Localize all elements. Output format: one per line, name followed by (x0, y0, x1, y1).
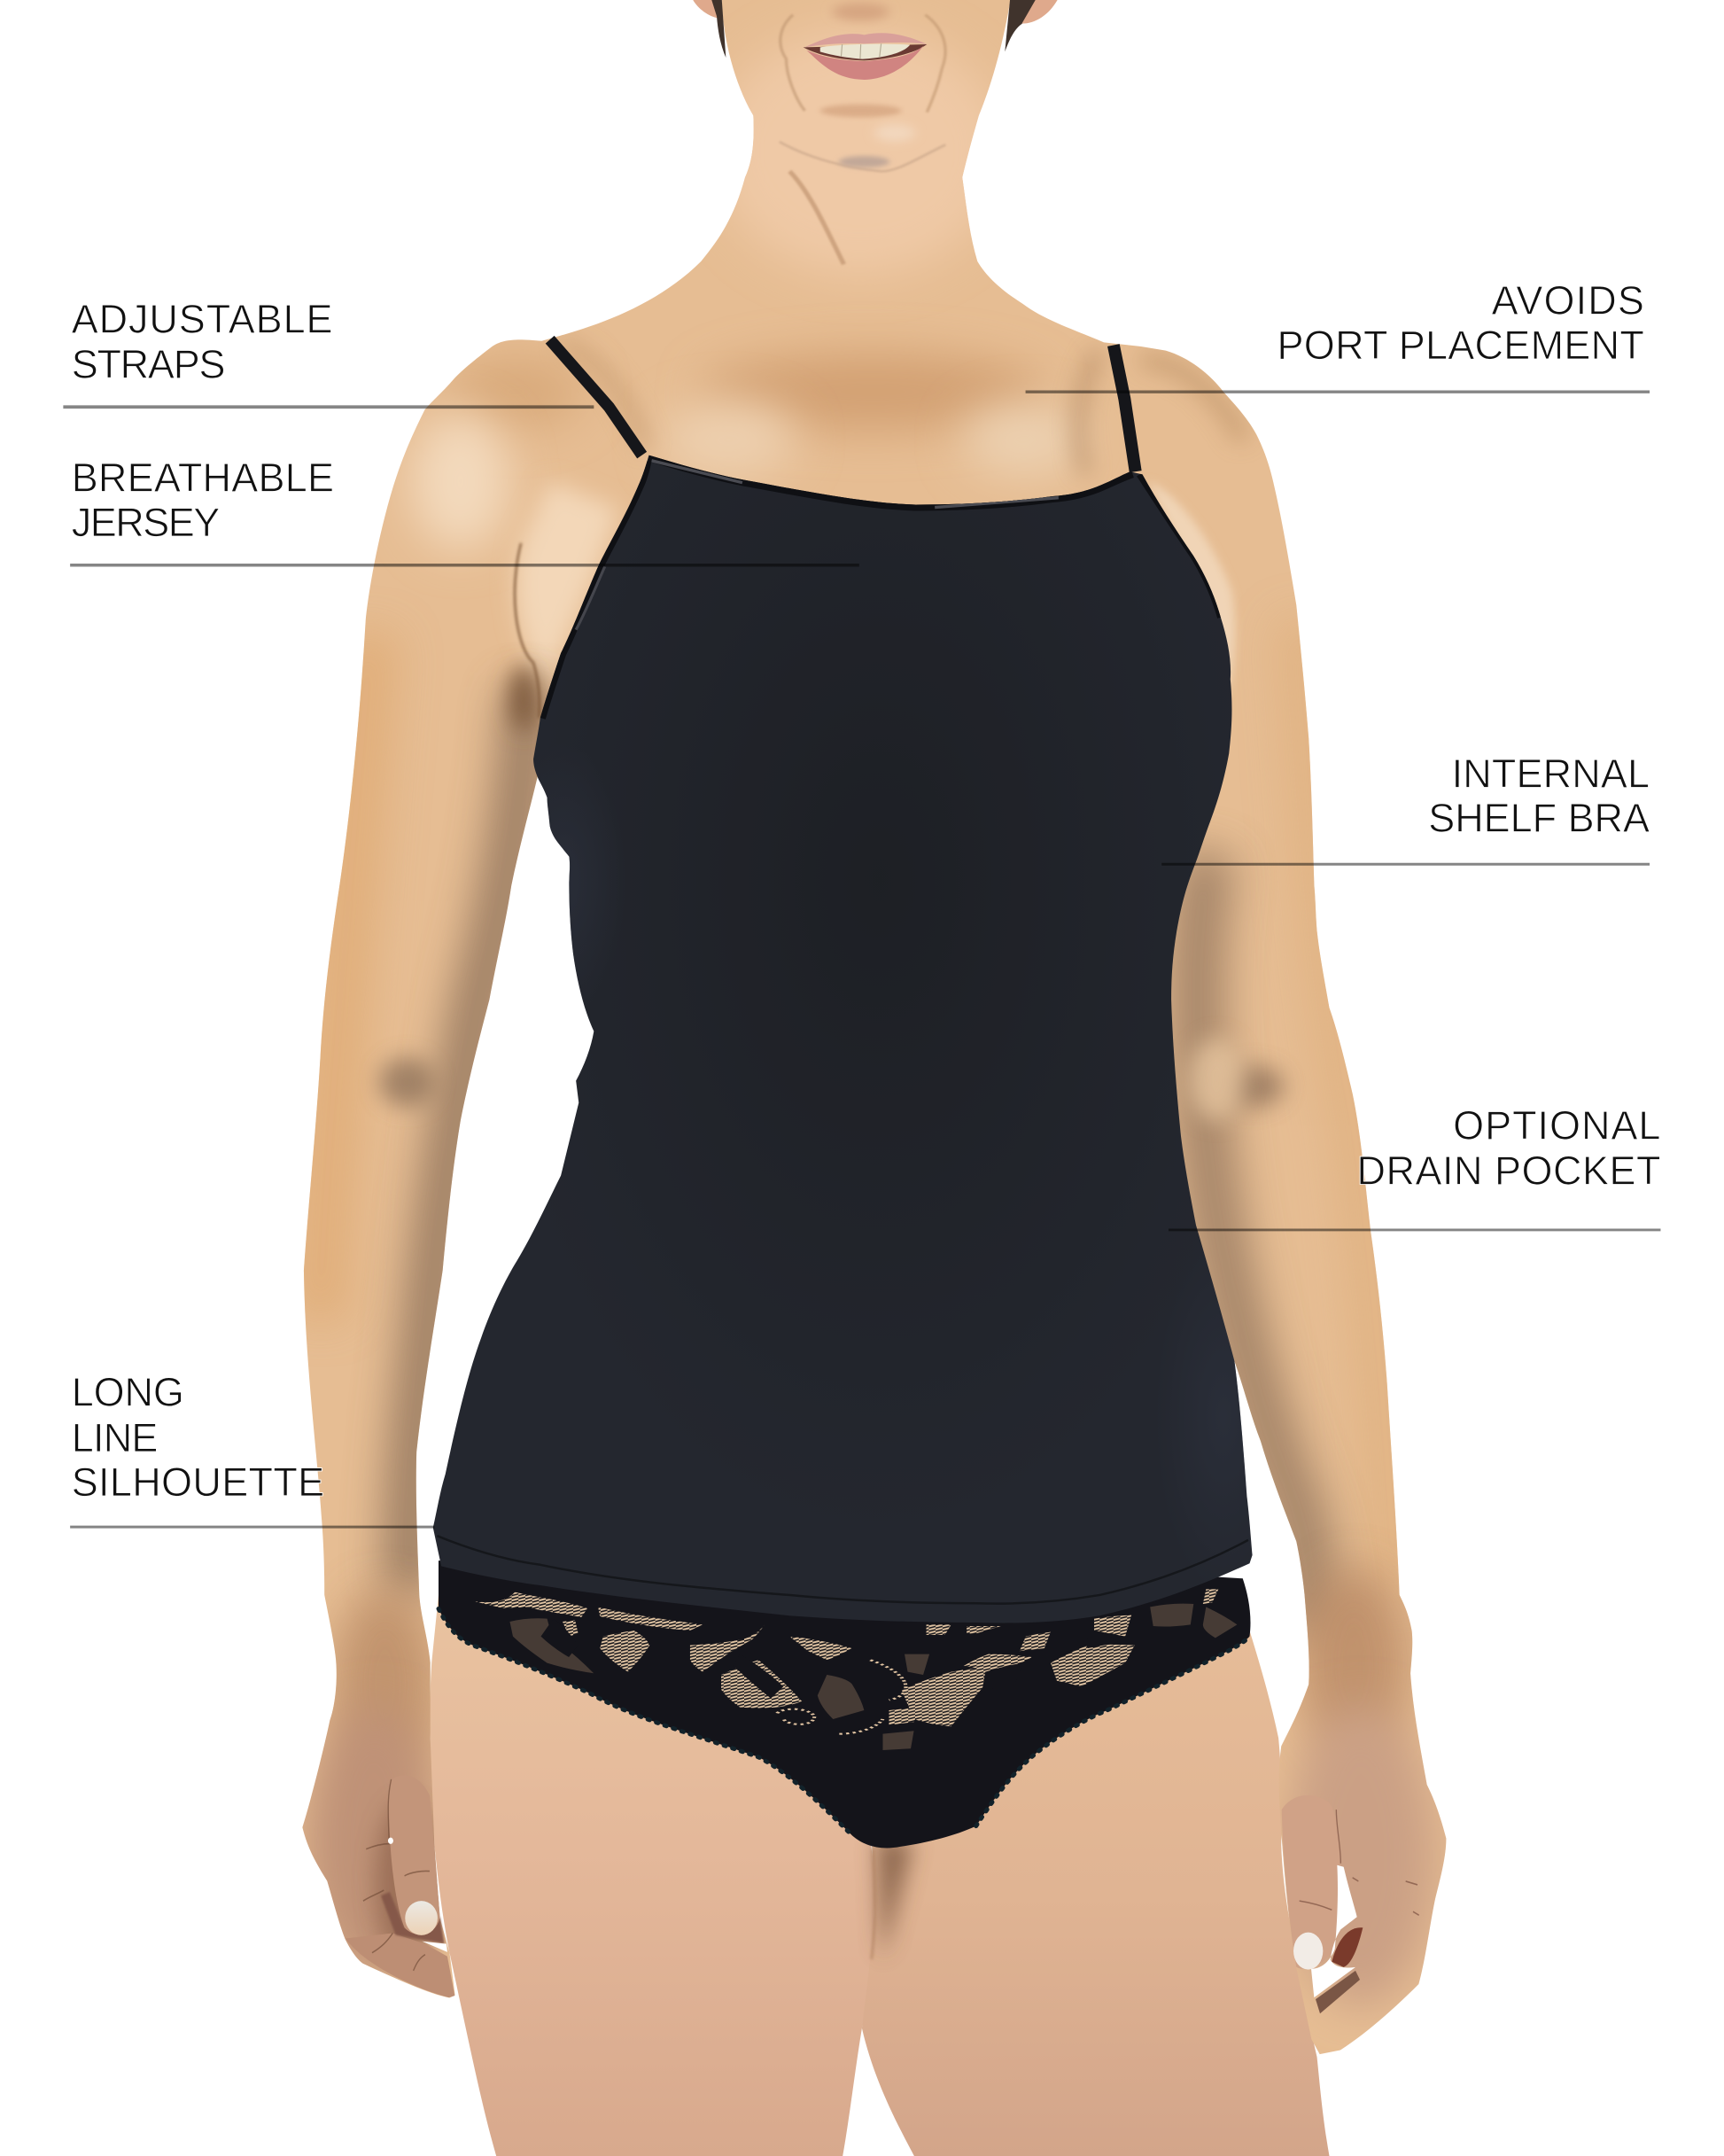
crotch shadow (877, 1835, 912, 1959)
label: optional drain pocket: OPTIONAL (1453, 1103, 1660, 1148)
leader line: breathable jersey (70, 564, 859, 566)
label: long line silhouette: SILHOUETTE (72, 1459, 324, 1505)
left shoulder tone (447, 356, 584, 428)
dark centre tone (481, 220, 1278, 1540)
chin highlight (874, 124, 915, 142)
right dark fingertip (1332, 1927, 1363, 1967)
label: optional drain pocket: DRAIN POCKET (1357, 1148, 1660, 1194)
right hand details (1282, 1795, 1419, 2013)
right elbow (1223, 1066, 1284, 1107)
neck and chest tone (733, 26, 987, 276)
paisley dotted outline (777, 1660, 905, 1734)
underwear (439, 1553, 1250, 1848)
label: optional drain pocket (1357, 1103, 1660, 1194)
right ear (1021, 0, 1058, 24)
label: breathable jersey: BREATHABLE (72, 455, 334, 501)
leader line: long line silhouette (70, 1526, 434, 1528)
chest light (660, 401, 797, 479)
label: adjustable straps: ADJUSTABLE (72, 297, 333, 342)
left hand details (346, 1775, 454, 1997)
left upper arm highlight (411, 412, 510, 550)
label: long line silhouette: LINE (72, 1415, 158, 1460)
left thumb (389, 1775, 440, 1934)
teeth (820, 44, 910, 59)
left arm outer tone (319, 633, 371, 1320)
neck shoulder shadow left (561, 344, 646, 447)
camisole body (433, 455, 1253, 1623)
under lip shadow (820, 105, 902, 117)
left elbow (379, 1057, 434, 1107)
right finger gap (1311, 1865, 1357, 1997)
label: adjustable straps: STRAPS (72, 342, 225, 387)
hem stitch (437, 1536, 1248, 1604)
right armhole binding (1139, 474, 1221, 618)
label: internal shelf bra: SHELF BRA (1428, 796, 1650, 841)
label: internal shelf bra: INTERNAL (1452, 751, 1650, 796)
figure: model wearing camisole (302, 0, 1446, 2156)
lace and brief base (439, 1553, 1250, 1848)
right armpit light (1148, 481, 1235, 695)
left armhole sheen (576, 566, 605, 630)
right creases (1300, 1810, 1419, 1915)
right lower finger shadow (1316, 1971, 1360, 2013)
inner thigh crease (872, 1849, 874, 1959)
left knuckle creases (363, 1779, 430, 1971)
right thumb (1282, 1795, 1340, 1969)
label: long line silhouette: LONG (72, 1370, 184, 1415)
left strap (550, 339, 642, 455)
mesh patches (472, 1589, 1218, 1726)
sheer patches (509, 1604, 1237, 1750)
right thigh (862, 1631, 1330, 2156)
label: avoids port placement (1277, 278, 1644, 368)
collar shadow (701, 354, 1044, 431)
left lower fingers (346, 1933, 454, 1997)
left thigh (430, 1595, 874, 2156)
lace pattern (472, 1589, 1237, 1750)
left thumb nail (405, 1901, 438, 1935)
left side sheen (501, 743, 625, 1017)
leader line: optional drain pocket (1169, 1229, 1660, 1231)
right hair (1005, 0, 1044, 51)
right thumb nail (1293, 1933, 1323, 1970)
left armhole binding (540, 461, 646, 718)
tooth gaps (841, 43, 881, 59)
lower right sheen (1154, 1237, 1293, 1595)
smile fold left (780, 15, 805, 111)
upper lip (805, 33, 927, 47)
left finger gaps (388, 1838, 393, 1844)
skin shading (305, 27, 1437, 2007)
left wrist and hand tone (333, 1588, 437, 1780)
nose shadow (832, 3, 889, 20)
left hair (711, 0, 726, 58)
skin: head, neck, shoulders, arms and hands (302, 0, 1446, 2054)
label: breathable jersey: JERSEY (72, 500, 220, 545)
right strap (1114, 345, 1136, 471)
label: long line silhouette (72, 1370, 324, 1505)
neck shoulder shadow right (1079, 351, 1099, 474)
left armpit light (516, 481, 618, 710)
neck tendon (789, 171, 844, 264)
left finger shadow (381, 1892, 445, 1944)
leader line: avoids port placement (1026, 391, 1650, 393)
face details (693, 0, 1058, 264)
black lace motifs (541, 1619, 1119, 1699)
camisole shading and trim (437, 220, 1293, 1604)
left ear (693, 0, 722, 19)
chin shadow (780, 142, 945, 171)
label: breathable jersey (72, 455, 334, 545)
right wrist and hand tone (1299, 1568, 1409, 1760)
leader line: adjustable straps (63, 406, 594, 408)
left armpit crease (515, 543, 540, 718)
left arm inner shadow (409, 688, 529, 1595)
lace scallop edge (439, 1608, 1250, 1835)
smile fold right (925, 15, 945, 113)
mouth interior (804, 44, 927, 60)
label: adjustable straps (72, 297, 333, 387)
neckline binding (648, 458, 1133, 508)
neckline sheen (652, 461, 1059, 508)
right arm inner shadow (1198, 852, 1317, 1636)
label: avoids port placement: PORT PLACEMENT (1277, 323, 1644, 368)
leader line: internal shelf bra (1161, 863, 1650, 865)
label: avoids port placement: AVOIDS (1492, 278, 1644, 323)
label: internal shelf bra (1428, 751, 1650, 841)
lower lip (806, 46, 923, 80)
right arm tone (1299, 619, 1395, 1595)
